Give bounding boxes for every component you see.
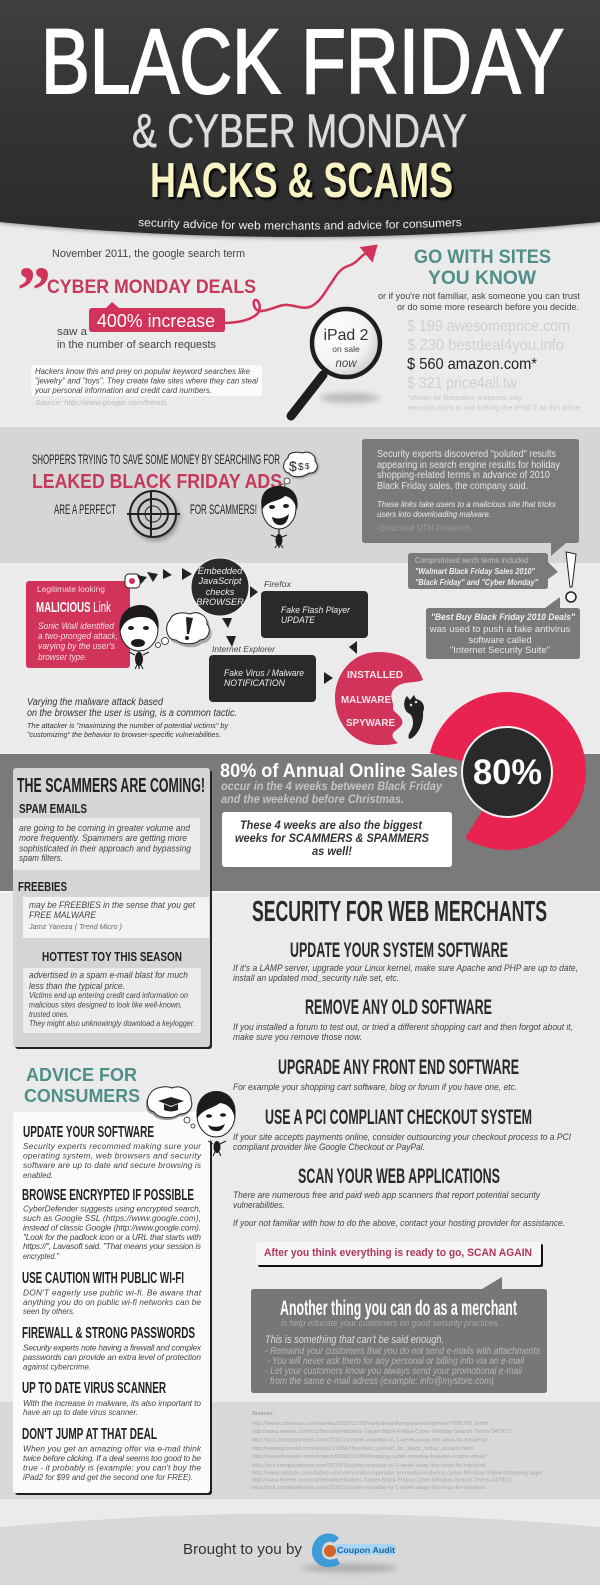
400% increase badge bbox=[89, 302, 225, 332]
icon: target bbox=[127, 490, 180, 538]
callout: best buy deals: "Internet Security Suite" bbox=[450, 645, 550, 656]
icon: thought bubble exclamation bbox=[156, 613, 209, 648]
icon: thought bubble graduation cap bbox=[147, 1087, 195, 1128]
hottest toy: less than the typical price. bbox=[29, 981, 125, 991]
callout: polluted results: Security experts discovered "poluted" results bbox=[377, 449, 556, 460]
tip: update software: Security experts recommed making sure your bbox=[23, 1141, 202, 1151]
section: PCI checkout bbox=[233, 1106, 571, 1153]
callout: polluted results: users into downloading malware. bbox=[377, 509, 491, 519]
tip: update software: software are up to date and secure browsing is bbox=[23, 1160, 201, 1170]
spam emails: spam filters. bbox=[19, 853, 63, 863]
tip: that deal: DON'T JUMP AT THAT DEAL bbox=[22, 1426, 157, 1443]
spam emails: more frequently. Spammers are getting more bbox=[19, 833, 187, 843]
callout: polluted results: Black Friday sales, the company said. bbox=[377, 481, 528, 492]
hottest toy: advertised in a spam e-mail blast for much bbox=[29, 970, 188, 980]
callout: biggest weeks: weeks for SCAMMERS & SPAMMERS bbox=[235, 831, 429, 845]
flow arrows bbox=[137, 568, 357, 684]
shoppers text: SHOPPERS TRYING TO SAVE SOME MONEY BY SEARCHING FOR bbox=[32, 451, 280, 467]
tip: firewall: FIREWALL & STRONG PASSWORDS bbox=[22, 1325, 195, 1342]
panel: malicious link: Sonic Wall identified bbox=[38, 621, 115, 631]
callout: another thing merchants can do: - Remaind your customers that you do not send e-mails with attachments bbox=[265, 1346, 540, 1357]
panel: malicious link: a two-pronged attack, bbox=[38, 631, 118, 641]
source line: Source: http://www.google.com/trends bbox=[35, 398, 167, 407]
for scammers: FOR SCAMMERS! bbox=[190, 501, 257, 517]
price list: $ 230 bestdeal4you.info bbox=[407, 337, 564, 354]
callout: polluted results: These links take users to a malicious site that tricks bbox=[377, 499, 557, 509]
section: front end software bbox=[233, 1056, 519, 1093]
advice text: or if you're not familiar, ask someone you can trust bbox=[378, 291, 580, 302]
icon: link button bbox=[125, 574, 140, 588]
tip: firewall: passwords can provide an extra level of protection bbox=[22, 1352, 201, 1362]
callout: compromised search terms: "Walmart Black Friday Sales 2010" bbox=[415, 567, 535, 576]
header banner bbox=[0, 0, 600, 241]
callout: compromised search terms bbox=[408, 553, 558, 589]
section: scan web applications: There are numerous free and paid web app scanners that report potential security bbox=[233, 1190, 541, 1201]
spam emails: are going to be coming in greater volume and bbox=[19, 823, 191, 833]
tip: firewall: Security experts note having a firewall and complex bbox=[23, 1343, 202, 1353]
tip: browse encrypted: such as Google SSL (https://www.google.com), bbox=[23, 1213, 201, 1223]
sales stat text bbox=[220, 761, 458, 806]
callout: polluted results: shopping-related terms in advance of 2010 bbox=[377, 470, 550, 481]
panel: malicious link bbox=[26, 581, 130, 668]
sources list: http://pcit.cmsplantnews.com/2010/11/cyber-monday-in-1-week-away-the-virus-for-hackers/ bbox=[252, 1463, 486, 1469]
node: fake virus notification bbox=[209, 655, 316, 702]
callout: best buy deals: "Best Buy Black Friday 2010 Deals" bbox=[431, 612, 576, 622]
sources list: http://www.eweek.com/c/a/Security/Hackers-Target-Black-Friday-Cyber-Monday-Search-Terms-347971/ bbox=[252, 1478, 512, 1484]
icon: angry man bbox=[120, 605, 159, 669]
tip: browse encrypted: BROWSE ENCRYPTED IF POSSIBLE bbox=[22, 1187, 194, 1204]
sources list bbox=[252, 1411, 542, 1491]
icon and label: installed malware bbox=[335, 652, 423, 745]
icon: exclamation mark bbox=[566, 552, 576, 602]
tagline: security advice for web merchants and advice for consumers bbox=[138, 218, 462, 230]
freebies: Jamz Yaneza ( Trend Micro ) bbox=[28, 922, 122, 931]
hottest toy: malicious sites designed to look like well-known, bbox=[29, 1000, 182, 1010]
icon: thought bubble dollars: $ bbox=[305, 462, 310, 471]
tip: update software: operating system, web browsers and security bbox=[23, 1150, 202, 1160]
sources list: http://www.cbsnews.com/stories/2010/11/29/earlyshow/living/parenting/main7096756.shtml bbox=[252, 1421, 488, 1427]
icon: magnifying glass iPad 2: on sale bbox=[332, 344, 360, 354]
panel: malicious link: varying by the user's bbox=[38, 641, 115, 651]
tip: firewall: against cybercrime. bbox=[23, 1362, 91, 1372]
freebies: may be FREEBIES in the sense that you get bbox=[29, 900, 195, 910]
callout: best buy deals bbox=[426, 597, 580, 659]
price list: $ 321 price4all.tw bbox=[407, 375, 517, 392]
tip: browse encrypted: encrypted." bbox=[23, 1251, 60, 1261]
sources list: http://www.allstate.com/safety-and-prevention-tips/take-precautions-during-cyber-Monday-online-shopping.aspx bbox=[252, 1470, 542, 1476]
icon and label: installed malware: INSTALLED bbox=[347, 670, 403, 681]
price list: $ 560 amazon.com* bbox=[407, 356, 537, 373]
callout: polluted results bbox=[362, 439, 579, 556]
callout: scan again: After you think everything is ready to go, SCAN AGAIN bbox=[264, 1247, 532, 1259]
advice text bbox=[378, 291, 580, 313]
section: scan web applications: vulnerabilities. bbox=[233, 1200, 285, 1211]
panel: leaked ads band bbox=[0, 427, 600, 563]
callout: scan again bbox=[256, 1242, 543, 1267]
sales stat text: and the weekend before Christmas. bbox=[221, 792, 404, 806]
section: remove old software: make sure you remove those now. bbox=[233, 1032, 362, 1043]
icon: thought bubble dollars bbox=[281, 452, 317, 488]
tip: firewall bbox=[22, 1325, 202, 1372]
tip: public wifi: DON'T eagerly use public wi-fi. Be aware that bbox=[23, 1288, 202, 1298]
icon: magnifying glass iPad 2 bbox=[291, 309, 380, 416]
tip: virus scanner: UP TO DATE VIRUS SCANNER bbox=[22, 1380, 166, 1397]
heading line two: YOU KNOW bbox=[428, 267, 537, 289]
section: update system: install an updated mod_security rule set, etc. bbox=[233, 973, 399, 984]
tip: virus scanner: With the increase in malware, its also important to bbox=[23, 1398, 201, 1408]
tip: that deal: true - it probably is (example: you can't buy the bbox=[23, 1462, 201, 1472]
section: update system bbox=[233, 939, 578, 984]
node: embedded JavaScript bbox=[191, 558, 249, 616]
panel: malicious link: browser type. bbox=[38, 652, 87, 662]
hackers note: "jewelry" and "toys". They create fake sites where they can steal bbox=[35, 376, 258, 386]
icon: smiling man bbox=[261, 486, 298, 548]
varying attack text: on the browser the user is using, is a common tactic. bbox=[27, 708, 237, 719]
are a perfect: ARE A PERFECT bbox=[54, 501, 116, 517]
price list: $ 199 awesomeprice.com bbox=[407, 318, 570, 335]
callout: another thing merchants can do bbox=[251, 1277, 547, 1393]
hackers note: your personal information and credit card numbers. bbox=[34, 386, 212, 395]
callout: best buy deals: software called bbox=[468, 635, 532, 646]
panel: the scammers are coming bbox=[13, 768, 212, 1049]
panel: malicious link: Legitimate looking bbox=[37, 584, 105, 594]
tip: public wifi: USE CAUTION WITH PUBLIC WI-FI bbox=[22, 1270, 184, 1287]
callout: another thing merchants can do: is help educate your customers on good security practices. bbox=[281, 1318, 500, 1329]
icon: malware worm bbox=[404, 695, 424, 739]
callout: another thing merchants can do: from the same e-mail adress (example: info@mystore.com) bbox=[270, 1376, 494, 1387]
callout: another thing merchants can do: - You will never ask them for any personal or billing info via an e-mail bbox=[267, 1356, 525, 1367]
heading: GO WITH SITES bbox=[414, 246, 551, 268]
logo: Coupon Audit bbox=[302, 1534, 398, 1572]
Internet Explorer label: Internet Explorer bbox=[212, 644, 276, 654]
tip: browse encrypted: https://", Lavasoft said. "That means your session is bbox=[23, 1241, 201, 1251]
node: embedded JavaScript: Embedded bbox=[198, 566, 243, 576]
icon: thought bubble dollars: $ bbox=[289, 458, 297, 474]
hottest toy: They might also unknowingly download a keylogger. bbox=[29, 1019, 195, 1028]
panel: Cyber Monday deals trend bbox=[17, 246, 376, 407]
icon: magnifying glass iPad 2: iPad 2 bbox=[324, 327, 369, 344]
sources list: http://www.pcworld.com/article/198697/hackers_poised_for_black_friday_assault.html bbox=[252, 1446, 473, 1452]
tip: update software: enabled. bbox=[23, 1170, 53, 1180]
footer background bbox=[0, 1514, 600, 1585]
freebies bbox=[18, 880, 209, 938]
sales stat text: occur in the 4 weeks between Black Friday bbox=[221, 779, 443, 793]
varying attack text: "customizing" the behavior to browser-specific vulnerabilities. bbox=[27, 730, 221, 739]
80 percent donut chart bbox=[430, 692, 586, 850]
node: fake flash player bbox=[261, 591, 368, 638]
callout: best buy deals: was used to push a fake antivirus bbox=[429, 624, 570, 635]
Firefox label: Firefox bbox=[264, 580, 292, 589]
tip: browse encrypted: CyberDefender suggests using encrypted search, bbox=[23, 1204, 201, 1214]
price footnote: amazon.com is not selling the iPad 2 at this price bbox=[408, 405, 580, 412]
freebies: FREE MALWARE bbox=[29, 910, 97, 920]
callout: biggest weeks: as well! bbox=[312, 844, 352, 858]
sources list: http://pcit.cmsplantnews.com/2010/11/cyber-monday-in-1-week-away-the-virus-for-hackers/ bbox=[252, 1438, 487, 1444]
advice for consumers heading bbox=[24, 1065, 140, 1106]
hottest toy bbox=[23, 950, 201, 1033]
node: fake flash player: Fake Flash Player bbox=[281, 605, 351, 616]
sales stat text: 80% of Annual Online Sales bbox=[220, 761, 458, 782]
callout: another thing merchants can do: - Let your customers know you always send your promotional e-mail bbox=[265, 1366, 523, 1377]
sources list: http://pcit.cmsplantnews.com/2010/11/cyber-monday-in-1-week-away-the-virus-for-hackers/ bbox=[252, 1485, 486, 1491]
section: scan web applications bbox=[233, 1165, 565, 1229]
logo: Coupon Audit: Coupon Audit bbox=[337, 1545, 395, 1555]
hottest toy: HOTTEST TOY THIS SEASON bbox=[42, 950, 182, 964]
section: front end software: For example your shopping cart software, blog or forum if you have one, etc. bbox=[233, 1082, 517, 1093]
saw a text: saw a bbox=[57, 326, 88, 338]
icon: thought bubble dollars: $ bbox=[298, 462, 304, 473]
sources list: http://www.foxnews.com/scitech/2009/11/30/shopping-cyber-monday-beware-scams-xmas/ bbox=[252, 1454, 486, 1460]
sources band background bbox=[0, 1402, 600, 1499]
section: remove old software bbox=[233, 996, 573, 1043]
sources list: http://www.eweek.com/c/a/Security/Hackers-Target-Black-Friday-Cyber-Monday-Search-Terms-347971/ bbox=[252, 1429, 512, 1435]
80 percent donut chart: 80% bbox=[473, 753, 542, 792]
advice text: or do some more research before you decide. bbox=[397, 302, 579, 313]
trend arrow bbox=[222, 246, 376, 323]
hottest toy: trusted ones. bbox=[29, 1010, 69, 1019]
subtitle: Cyber Monday: & CYBER MONDAY bbox=[132, 104, 467, 157]
panel: gray sales band bbox=[0, 751, 600, 893]
tip: that deal: iPad2 for $99 and get the second one for FREE). bbox=[23, 1472, 193, 1482]
spam emails: SPAM EMAILS bbox=[19, 802, 87, 816]
advice for consumers heading: CONSUMERS bbox=[24, 1086, 140, 1106]
tip: that deal: twice before clicking. If a deal seems too good to be bbox=[23, 1453, 201, 1463]
price footnote: *shown for illustration purposes only. bbox=[408, 395, 523, 402]
advice for consumers heading: ADVICE FOR bbox=[26, 1065, 137, 1085]
node: fake flash player: UPDATE bbox=[281, 615, 316, 626]
icon and label: installed malware: MALWARE bbox=[341, 695, 391, 706]
tip: virus scanner: have an up to date virus scanner. bbox=[23, 1407, 138, 1417]
node: embedded JavaScript: JavaScript bbox=[198, 576, 242, 586]
search term intro: November 2011, the google search term bbox=[52, 248, 245, 260]
tip: public wifi bbox=[22, 1270, 202, 1316]
tip: that deal bbox=[22, 1426, 202, 1482]
heading: THE SCAMMERS ARE COMING! bbox=[17, 774, 205, 797]
price list bbox=[407, 318, 570, 392]
callout: polluted results: -SonicWall UTM Research bbox=[377, 523, 470, 533]
leaked ads heading: LEAKED BLACK FRIDAY ADS bbox=[32, 471, 282, 493]
callout: another thing merchants can do: This is something that can't be said enough. bbox=[265, 1334, 444, 1346]
callout: compromised search terms: "Black Friday" and "Cyber Monday" bbox=[415, 578, 538, 587]
icon: magnifying glass iPad 2: now bbox=[335, 358, 357, 370]
varying attack text: Varying the malware attack based bbox=[27, 697, 163, 708]
tip: public wifi: anything you do on public wi-fi networks can be bbox=[23, 1297, 201, 1307]
400% increase badge: 400% increase bbox=[97, 311, 215, 331]
callout: biggest weeks: These 4 weeks are also the biggest bbox=[240, 818, 423, 832]
price footnote bbox=[408, 395, 580, 412]
callout: polluted results: appearing in search engine results for holiday bbox=[377, 460, 560, 471]
tip: public wifi: seen by others. bbox=[23, 1306, 75, 1316]
subtitle: Hacks and Scams: HACKS & SCAMS bbox=[150, 154, 453, 208]
spam emails bbox=[13, 802, 200, 870]
panel: malicious link: MALICIOUS Link bbox=[36, 599, 111, 616]
callout: biggest weeks bbox=[222, 812, 452, 867]
node: fake virus notification: Fake Virus / Malware bbox=[224, 668, 304, 679]
search requests text: in the number of search requests bbox=[57, 339, 216, 351]
panel: advice for consumers bbox=[13, 1112, 212, 1495]
tip: browse encrypted: "Look for the padlock icon or a URL that starts with bbox=[23, 1232, 201, 1242]
hackers note: Hackers know this and prey on popular keyword searches like bbox=[35, 367, 251, 376]
node: embedded JavaScript: BROWSER bbox=[196, 597, 244, 607]
tip: update software bbox=[23, 1124, 202, 1180]
icon: quote mark: ” bbox=[17, 252, 51, 328]
brought to you by: Brought to you by bbox=[183, 1541, 303, 1558]
varying attack text: The attacker is "maximizing the number of potential victims" by bbox=[27, 721, 229, 730]
tip: virus scanner bbox=[22, 1380, 201, 1417]
node: fake virus notification: NOTIFICATION bbox=[224, 678, 285, 689]
tip: update software: UPDATE YOUR SOFTWARE bbox=[23, 1124, 154, 1141]
node: embedded JavaScript: checks bbox=[206, 587, 235, 597]
hackers note bbox=[31, 365, 262, 396]
hottest toy: Victims end up entering credit card information on bbox=[29, 991, 188, 1000]
panel: security for web merchants bbox=[233, 896, 578, 1229]
tip: browse encrypted: instead of classic Google (http://www.google.com). bbox=[23, 1222, 201, 1232]
varying attack text bbox=[27, 697, 237, 739]
tip: that deal: When you get an amazing offer via e-mail think bbox=[23, 1444, 202, 1454]
icon and label: installed malware: SPYWARE bbox=[346, 718, 395, 729]
spam emails: sophisticated in their approach and bypassing bbox=[19, 844, 191, 854]
section: scan web applications: If your not familiar with how to do the above, contact your hosting provider for assistance. bbox=[233, 1218, 565, 1229]
icon: smiling man advisor bbox=[197, 1091, 236, 1156]
freebies: FREEBIES bbox=[18, 880, 67, 894]
tip: browse encrypted bbox=[22, 1187, 201, 1261]
Cyber Monday Deals heading: CYBER MONDAY DEALS bbox=[47, 277, 256, 298]
section: PCI checkout: compliant provider like Google Checkout or PayPal. bbox=[233, 1142, 425, 1153]
sources list: Sources: bbox=[252, 1411, 274, 1417]
callout: compromised search terms: Compromised serch terms included: bbox=[415, 556, 530, 565]
panel: go with sites you know bbox=[378, 246, 580, 412]
